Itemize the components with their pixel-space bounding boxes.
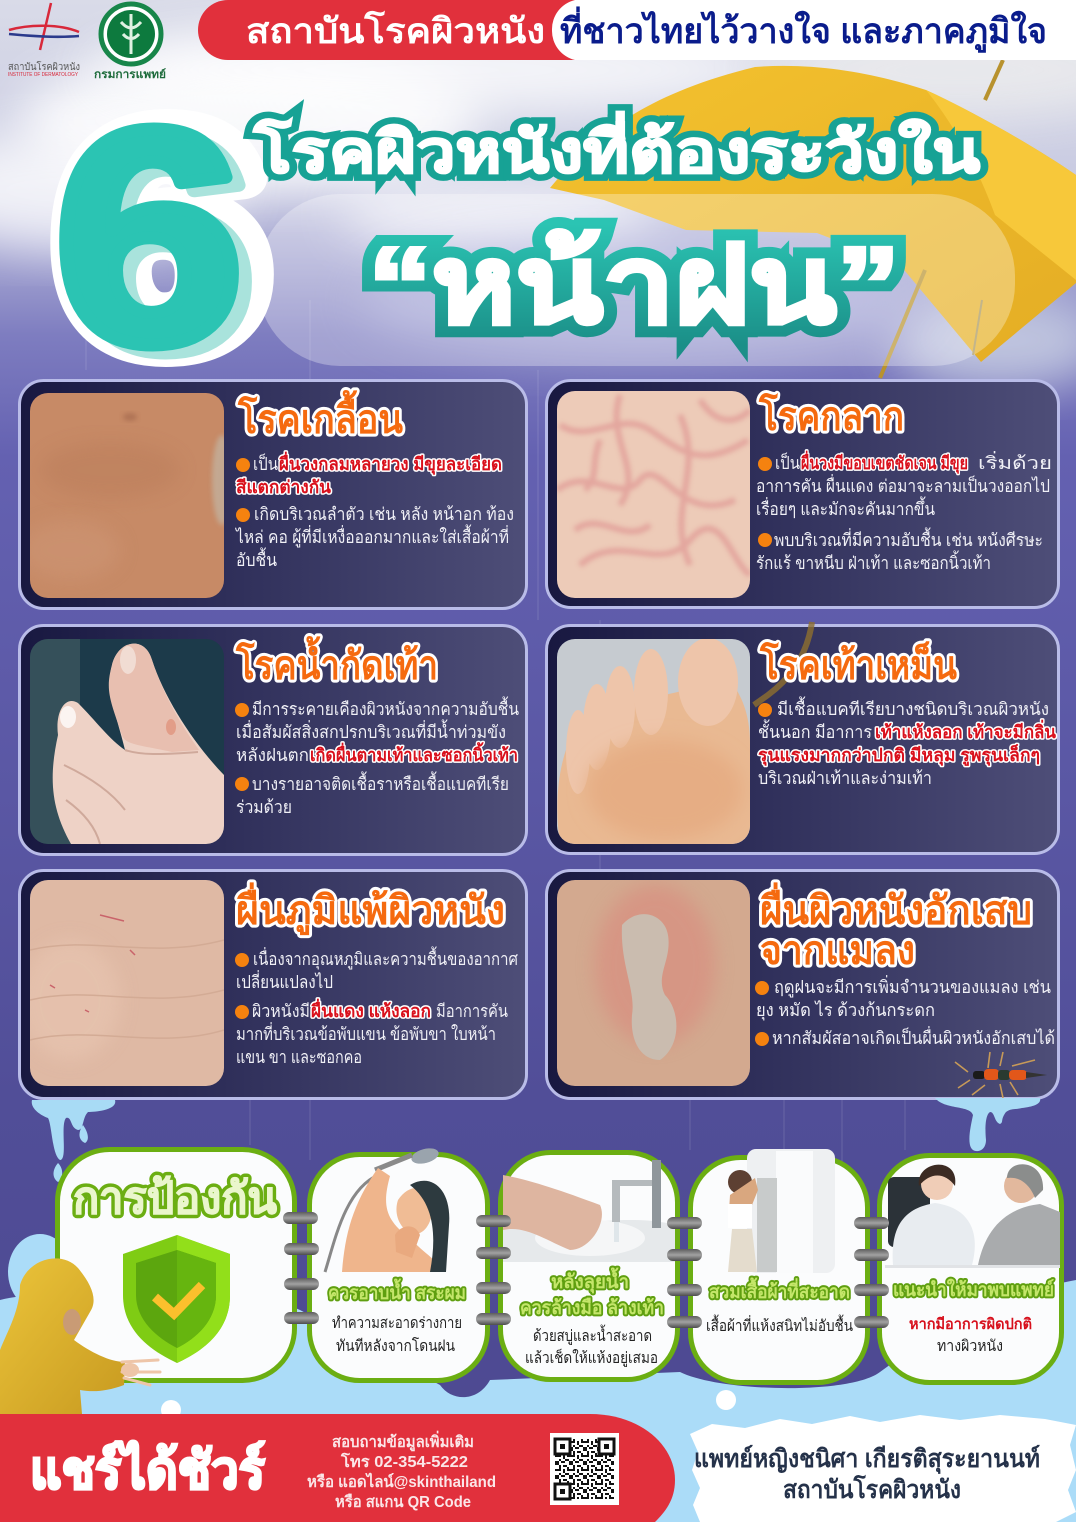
icon: shield with check [123, 1235, 230, 1363]
slogan: แชร์ได้ชัวร์ [30, 1440, 265, 1500]
title line 2: “หน้าฝน” [368, 224, 900, 345]
symptoms text: ยุง หมัด ไร ด้วงก้นกระดก [756, 1000, 935, 1021]
symptoms text: อับชื้น [236, 547, 277, 570]
photo: woman at wardrobe [728, 1149, 835, 1273]
symptoms text: พบบริเวณที่มีความอับชื้น เช่น หนังศีรษะ [774, 527, 1043, 550]
header banner: ที่ชาวไทยไว้วางใจ และภาคภูมิใจ [560, 6, 1047, 53]
icon: rove beetle [955, 1052, 1047, 1098]
symptoms text: มีการระคายเคืองผิวหนังจากความอับชื้น [252, 696, 519, 719]
symptoms text: บางรายอาจติดเชื้อราหรือเชื้อแบคทีเรีย [252, 771, 509, 794]
heading: ผื่นผิวหนังอักเสบ [760, 882, 1032, 933]
description [525, 1324, 658, 1368]
symptoms text: เท้าแห้งลอก เท้าจะมีกลิ่น [875, 719, 1056, 742]
heading: โรคเกลื้อน [237, 390, 403, 442]
contact info: สอบถามข้อมูลเพิ่มเติม [332, 1430, 474, 1453]
water blob left [8, 1234, 72, 1310]
illustration: child in yellow raincoat [0, 1258, 160, 1414]
author credit: แพทย์หญิงชนิศา เกียรติสุระยานนท์ [694, 1444, 1040, 1475]
translucent panel behind title [258, 194, 1015, 366]
heading: โรคน้ำกัดเท้า [235, 636, 438, 688]
photo: atopic skin [20, 880, 224, 1086]
card: bathe [310, 1146, 488, 1380]
photo: hand washing at faucet [503, 1160, 675, 1262]
panel: ringworm [546, 380, 1058, 608]
footer red panel [0, 1414, 675, 1522]
author credit: สถาบันโรคผิวหนัง [783, 1474, 961, 1504]
symptoms text [235, 946, 518, 1067]
illustration: yellow umbrella [550, 60, 1076, 378]
photo: doctor with patient [885, 1164, 1060, 1268]
photo: toes with peeling skin [30, 639, 224, 844]
title line 1: โรคผิวหนังที่ต้องระวังใน [253, 111, 980, 185]
heading: ผื่นภูมิแพ้ผิวหนัง [236, 882, 505, 935]
symptoms text: เป็น [253, 453, 278, 474]
symptoms text: มากที่บริเวณข้อพับแขน ข้อพับขา ใบหน้า [236, 1022, 496, 1044]
symptoms text: บริเวณฝ่าเท้าและง่ามเท้า [758, 768, 932, 788]
panel: insect dermatitis [546, 870, 1058, 1098]
panel: immersion foot [20, 626, 526, 854]
heading line 2: จากแมลง [760, 929, 915, 973]
description: ด้วยสบู่และน้ำสะอาด [533, 1324, 652, 1346]
contact info [307, 1430, 496, 1511]
symptoms text: เกิดบริเวณลำตัว เช่น หลัง หน้าอก ท้อง [254, 504, 514, 524]
photo: insect rash [557, 880, 750, 1086]
symptoms text: ชั้นนอก มีอาการ [758, 719, 872, 742]
card: wash hands [500, 1152, 678, 1380]
header banner [198, 0, 1076, 60]
symptoms text: ฤดูฝนจะมีการเพิ่มจำนวนของแมลง เช่น [774, 975, 1051, 998]
droplet right [716, 1390, 736, 1410]
contact info: โทร 02-354-5222 [340, 1452, 468, 1471]
description: แล้วเช็ดให้แห้งอยู่เสมอ [525, 1348, 658, 1368]
symptoms text: เรื่อยๆ และมักจะคันมากขึ้น [756, 496, 935, 519]
big number 6: 6 [67, 74, 257, 415]
symptoms text [234, 451, 514, 570]
title line 1: โรคผิวหนังที่ต้องระวังใน [253, 111, 980, 185]
big number 6: 6 [54, 66, 244, 407]
symptoms text: ผื่นวงกลมหลายวง มีขุยละเอียด [279, 451, 502, 475]
logo: Institute of Dermatology [8, 3, 80, 78]
symptoms text: หากสัมผัสอาจเกิดเป็นผื่นผิวหนังอักเสบได้ [772, 1026, 1055, 1048]
photo: ringworm skin [557, 391, 750, 598]
symptoms text: สีแตกต่างกัน [236, 477, 331, 497]
photo: woman showering [325, 1146, 449, 1272]
description: ทำความสะอาดร่างกาย [332, 1315, 462, 1332]
subheading line 2: ควรล้างมือ ล้างเท้า [520, 1297, 664, 1319]
symptoms text: รุนแรงมากกว่าปกติ มีหลุม รูพรุนเล็กๆ [758, 743, 1040, 767]
author credit [694, 1444, 1040, 1504]
symptoms text: ผื่นวงมีขอบเขตชัดเจน มีขุย [801, 450, 968, 474]
card: see a doctor [880, 1156, 1062, 1382]
symptoms text: หลังฝนตก [236, 745, 309, 765]
description [909, 1315, 1032, 1355]
big number 6: 6 [62, 67, 262, 408]
heading: prevention: การป้องกัน [73, 1174, 277, 1223]
symptoms text: มีอาการคัน [436, 1001, 508, 1021]
description: เสื้อผ้าที่แห้งสนิทไม่อับชื้น [706, 1314, 853, 1335]
contact info: หรือ สแกน QR Code [335, 1493, 471, 1511]
notebook ring connectors [283, 1212, 889, 1328]
logo: Institute of Dermatology: INSTITUTE OF DERMATOLOGY [8, 72, 79, 78]
contact info: หรือ แอดไลน์@skinthailand [307, 1472, 496, 1491]
symptoms text [755, 975, 1055, 1048]
subheading: สวมเสื้อผ้าที่สะอาด [709, 1277, 850, 1303]
water drips: right [935, 1098, 1040, 1151]
subheading line 1: หลังลุยน้ำ [551, 1267, 629, 1294]
symptoms text: เปลี่ยนแปลงไป [236, 970, 333, 992]
subheading: แนะนำให้มาพบแพทย์ [893, 1278, 1054, 1301]
symptoms text: เนื่องจากอุณหภูมิและความชื้นของอากาศ [253, 946, 518, 970]
symptoms text: ผิวหนังมี [252, 1001, 310, 1021]
title line 2: “หน้าฝน” [368, 224, 900, 345]
symptoms text: ไหล่ คอ ผู้ที่มีเหงื่อออกมากและใส่เสื้อผ้าที่ [234, 524, 509, 548]
QR code [550, 1433, 619, 1505]
heading: โรคกลาก [758, 393, 904, 439]
symptoms text: เริ่มด้วย [978, 451, 1052, 473]
subheading: ควรอาบน้ำ สระผม [328, 1278, 466, 1304]
description [332, 1315, 462, 1355]
symptoms text [756, 450, 1052, 573]
heading: โรคเท้าเหม็น [759, 640, 957, 688]
symptoms text: เมื่อสัมผัสสิ่งสกปรกบริเวณที่มีน้ำท่วมขัง [236, 719, 506, 742]
card: prevention heading [58, 1150, 294, 1380]
symptoms text: เกิดผื่นตามเท้าและซอกนิ้วเท้า [310, 742, 518, 765]
logo: Institute of Dermatology: สถาบันโรคผิวหนัง [8, 60, 80, 73]
symptoms text: ร่วมด้วย [236, 797, 292, 817]
symptoms text: มีเชื้อแบคทีเรียบางชนิดบริเวณผิวหนัง [777, 696, 1049, 719]
symptoms text: เป็น [775, 452, 800, 473]
card: clean clothes [690, 1149, 868, 1382]
description: หากมีอาการผิดปกติ [909, 1315, 1032, 1333]
symptoms text [235, 696, 519, 817]
author brush panel [690, 1415, 1076, 1522]
symptoms text: แขน ขา และซอกคอ [236, 1047, 362, 1067]
description: ทันทีหลังจากโดนฝน [336, 1337, 455, 1355]
photo: tinea versicolor skin [20, 393, 232, 598]
description: ทางผิวหนัง [937, 1338, 1003, 1355]
logo: Department of Medical Services [94, 2, 166, 81]
photo: foot sole [557, 638, 750, 844]
panel: smelly feet [546, 622, 1058, 854]
symptoms text: ผื่นแดง แห้งลอก [311, 998, 431, 1021]
header banner: สถาบันโรคผิวหนัง [246, 10, 545, 51]
lower light-blue water area [0, 1280, 1076, 1522]
panel: atopic dermatitis [20, 870, 526, 1098]
water drips: left [32, 1100, 115, 1182]
heading: prevention: การป้องกัน [73, 1174, 277, 1223]
symptoms text: รักแร้ ขาหนีบ ฝ่าเท้า และซอกนิ้วเท้า [756, 550, 991, 573]
symptoms text [758, 696, 1056, 788]
logo: Department of Medical Services: กรมการแพทย์ [94, 68, 166, 81]
panel: tinea versicolor [20, 380, 526, 608]
water droplet [161, 1400, 181, 1420]
